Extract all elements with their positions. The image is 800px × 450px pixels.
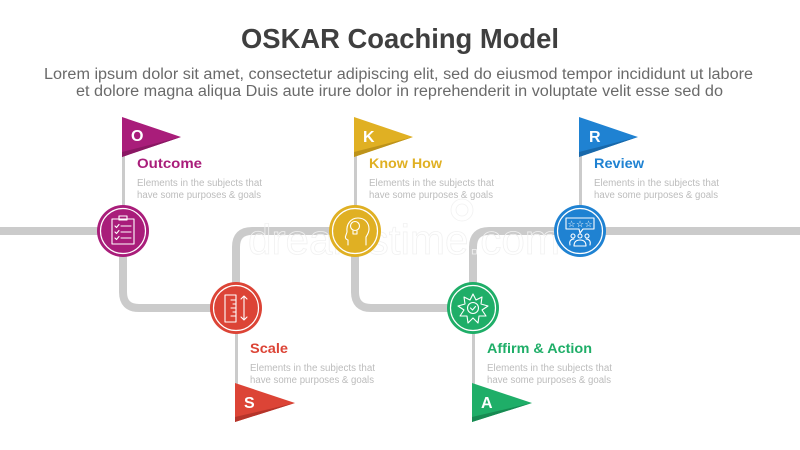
watermark: dreamstime.com [248, 216, 560, 263]
text Know How: Elements in the subjects that [369, 178, 494, 189]
icon: ruler and arrow [210, 282, 262, 334]
flag K: K [363, 129, 375, 146]
text Know How [369, 178, 494, 201]
icon: star rating and people: ☆ [584, 219, 593, 229]
heading Outcome: Outcome [137, 155, 202, 171]
text Scale: have some purposes & goals [250, 375, 374, 386]
text Review [594, 178, 719, 201]
flag A: A [481, 395, 493, 412]
flag O: O [131, 128, 143, 145]
description text: Lorem ipsum dolor sit amet, consectetur adipiscing elit, sed do eiusmod tempor incididunt ut labore [44, 66, 753, 83]
flag pole K [354, 150, 357, 210]
flag pole S [235, 332, 238, 388]
step O: Outcome [97, 117, 262, 257]
step S: Scale [210, 282, 375, 422]
heading Review: Review [594, 155, 644, 171]
icon: star rating and people [554, 205, 606, 257]
winding road path [0, 231, 800, 308]
flag pole A [472, 332, 475, 388]
flag R [579, 117, 638, 157]
text Know How: have some purposes & goals [369, 190, 493, 201]
description text: et dolore magna aliqua Duis aute irure dolor in reprehenderit in voluptate velit esse sed do [76, 83, 723, 100]
flag A [472, 383, 532, 422]
text Review: have some purposes & goals [594, 190, 718, 201]
heading Know How: Know How [369, 155, 442, 171]
flag R: R [589, 129, 601, 146]
text Outcome: have some purposes & goals [137, 190, 261, 201]
text Affirm & Action [487, 363, 612, 386]
flag O [122, 117, 181, 157]
icon: star rating and people: ☆ [567, 219, 576, 229]
step R: Review [554, 117, 719, 257]
text Scale [250, 363, 375, 386]
text Affirm & Action: Elements in the subjects that [487, 363, 612, 374]
text Affirm & Action: have some purposes & goals [487, 375, 611, 386]
icon: badge with check [447, 282, 499, 334]
description text [44, 66, 753, 100]
step A: Affirm & Action [447, 282, 612, 422]
heading Affirm & Action: Affirm & Action [487, 340, 592, 356]
icon: star rating and people: ☆ [576, 219, 584, 229]
icon: head with light bulb [329, 205, 381, 257]
flag pole R [579, 150, 582, 210]
text Outcome [137, 178, 262, 201]
flag S [235, 383, 295, 422]
text Outcome: Elements in the subjects that [137, 178, 262, 189]
text Scale: Elements in the subjects that [250, 363, 375, 374]
flag S: S [244, 395, 255, 412]
step K: Know How [329, 117, 494, 257]
icon: clipboard checklist [97, 205, 149, 257]
title: OSKAR Coaching Model [241, 23, 559, 54]
heading Scale: Scale [250, 340, 288, 356]
flag K [354, 117, 413, 157]
flag pole O [122, 150, 125, 210]
text Review: Elements in the subjects that [594, 178, 719, 189]
